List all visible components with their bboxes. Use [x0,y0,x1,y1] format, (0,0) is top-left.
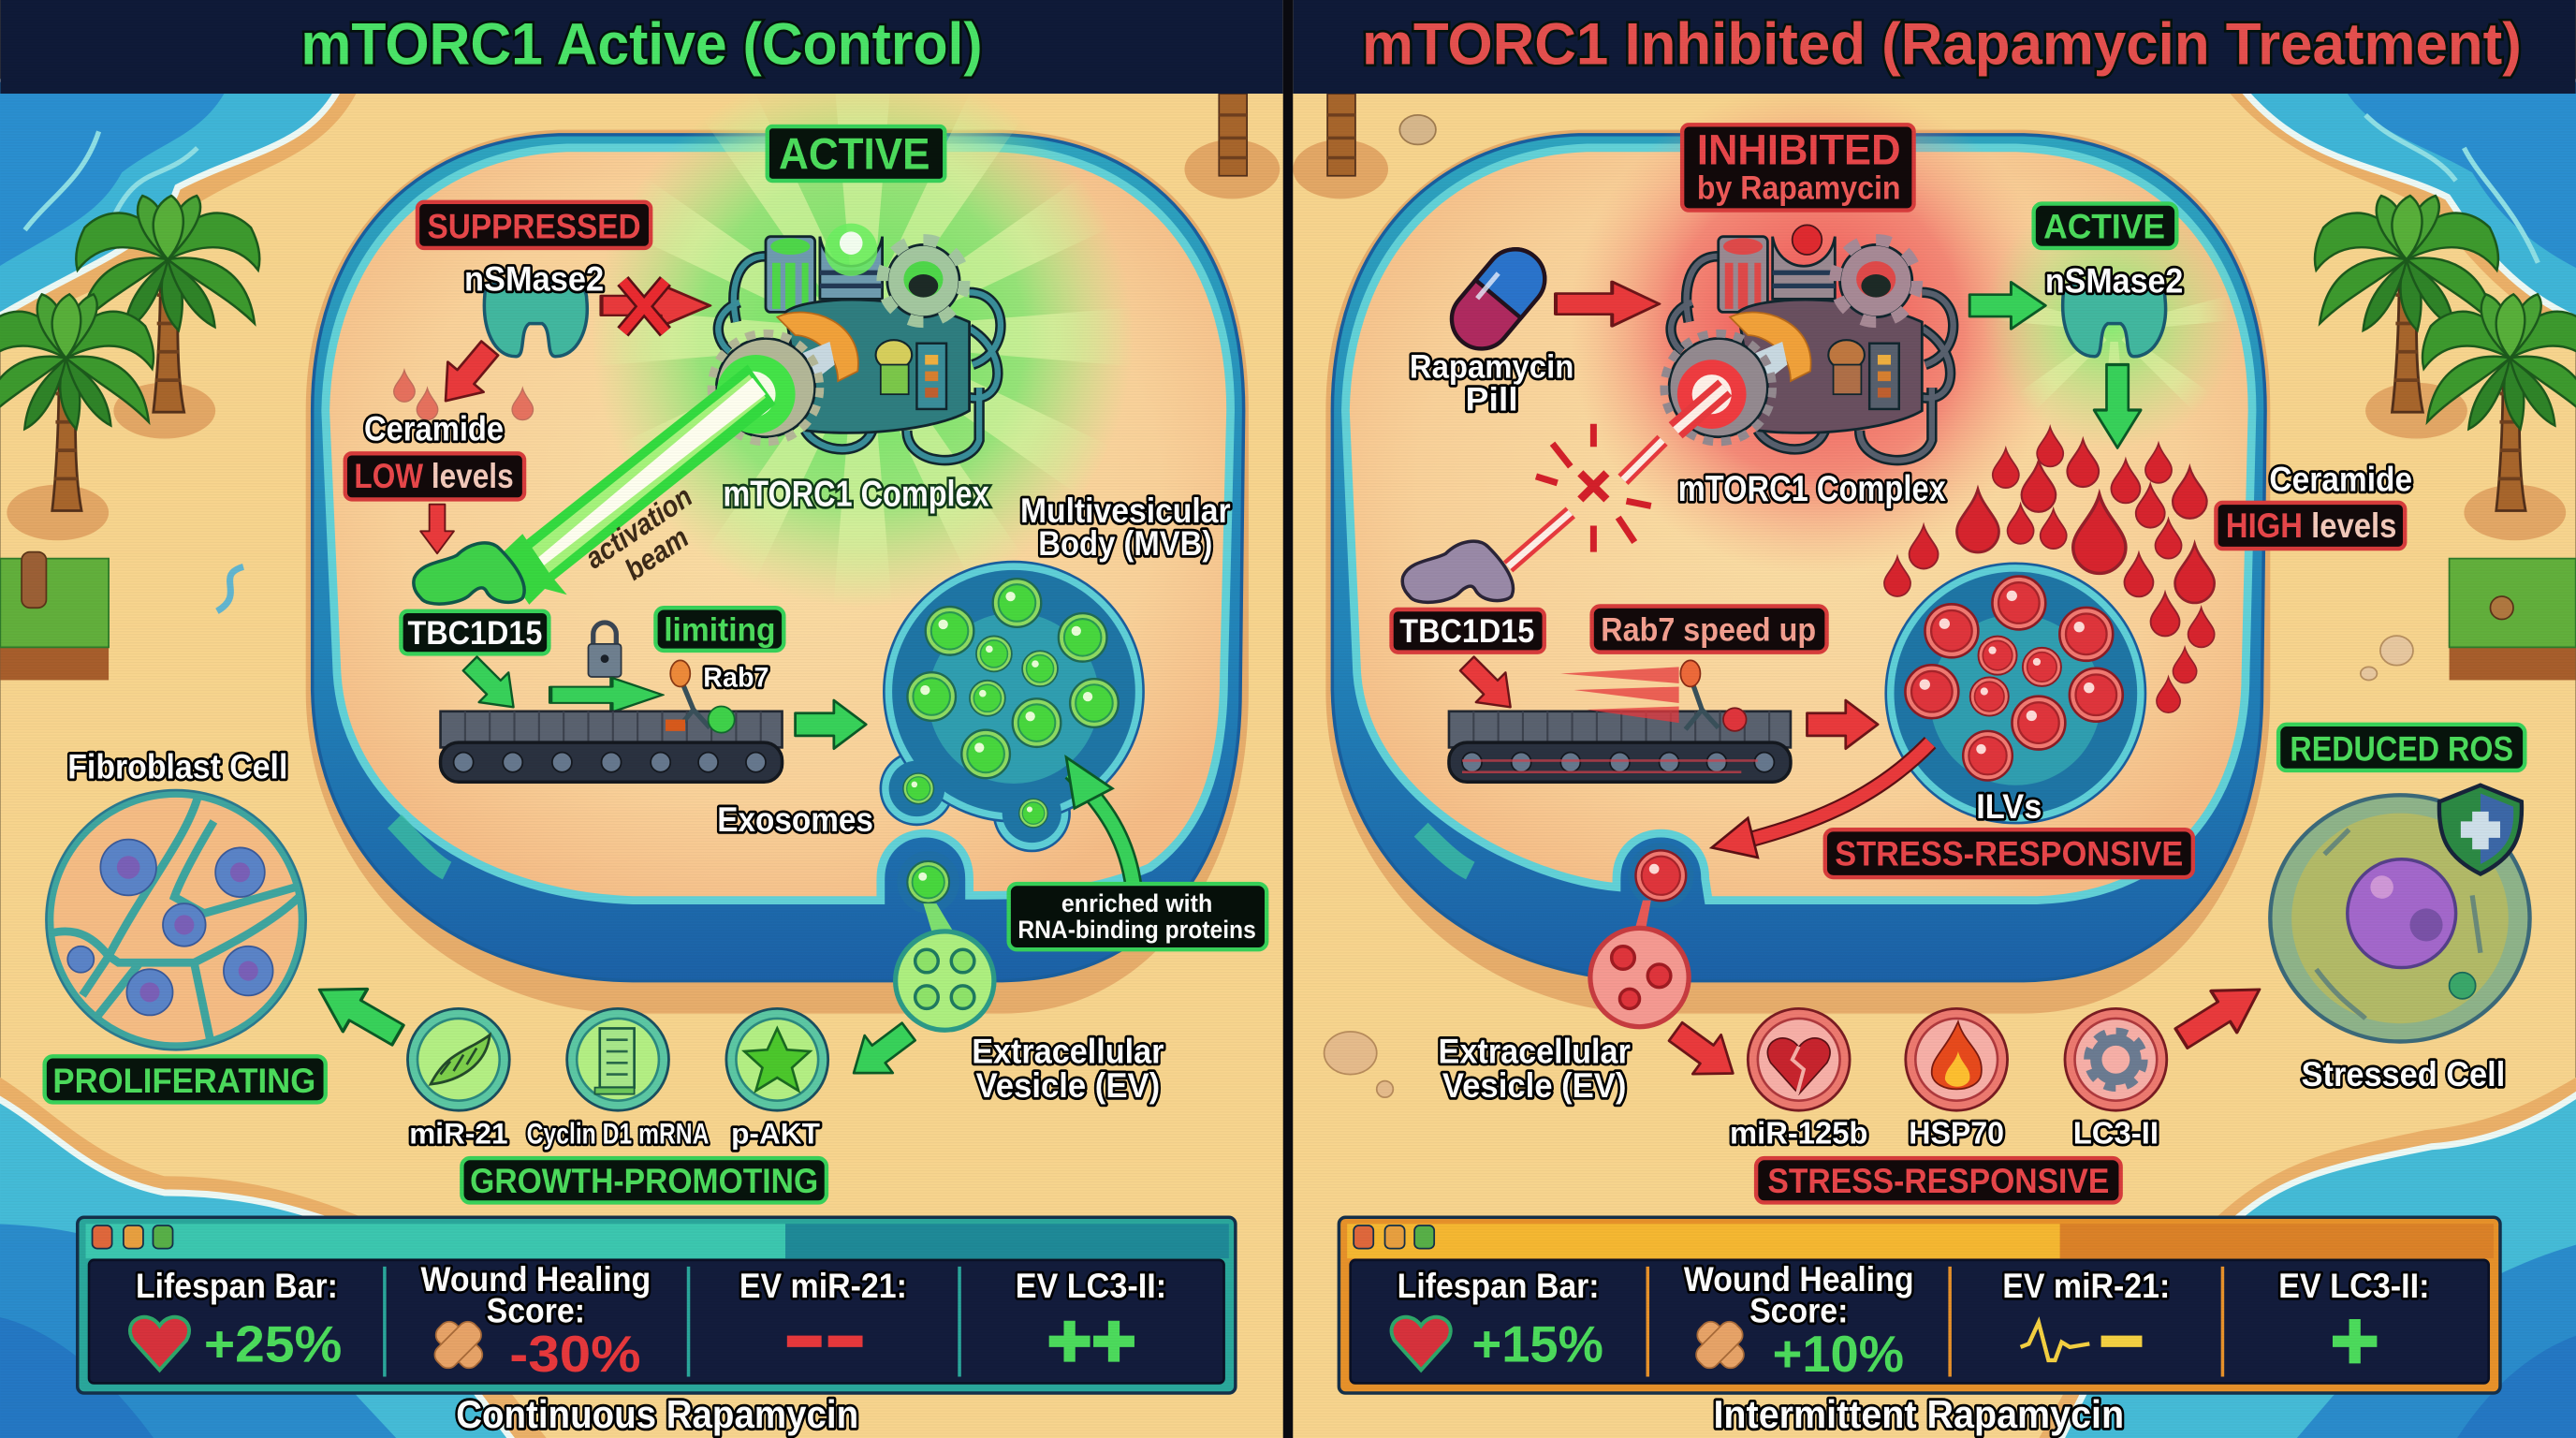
enzyme: nSMase2 right [2063,283,2166,357]
tag: ACTIVE: ACTIVE [779,130,929,180]
ceramide drops: high [1884,427,2215,712]
labels: cargo right: miR-125b [1730,1116,1867,1151]
metric: lifespan right: +15% [1472,1316,1603,1373]
labels: cargo right: LC3-II [2073,1116,2159,1151]
metric: wound healing right: +10% [1773,1326,1904,1383]
labels: cargo left: p-AKT [731,1116,820,1150]
label: Fibroblast Cell: Fibroblast Cell [67,748,287,786]
palm trunk: left panel top [1184,94,1280,198]
metric: EV LC3-II right: EV LC3-II: [2278,1267,2430,1305]
label: Rapamycin Pill: Rapamycin [1410,349,1573,386]
label: Extracellular Vesicle right [1439,1032,1631,1105]
broken beam [1508,388,1725,566]
title: left: mTORC1 Active (Control) [300,11,983,77]
icon: p-AKT [726,1008,828,1110]
MVB: left [881,562,1144,851]
arrow: nSMase2 to ceramide [428,333,507,416]
header bar: right [1293,0,2576,94]
icon: Cyclin D1 mRNA [567,1008,668,1110]
icon: miR-125b broken heart [1748,1008,1850,1110]
palm trunk and rock: right panel top [1293,94,1436,198]
metric: lifespan right [1392,1267,1603,1373]
header bar: left [0,0,1283,94]
tag: STRESS-RESPONSIVE inner: STRESS-RESPONSIVE [1835,835,2183,873]
mTORC1 glow: left [603,94,1122,597]
palm trees: left panel [0,196,259,540]
TBC1D15 grey [1402,541,1513,602]
enzyme: nSMase2 [484,283,587,357]
tag: INHIBITED: by Rapamycin [1697,169,1901,206]
label: Ceramide right: Ceramide [2269,461,2412,499]
grass island: left [0,552,109,680]
window buttons right [1354,1225,1434,1249]
arrow: cargo to stressed cell [2169,969,2273,1059]
blocked arrow with red X [602,281,710,331]
label: Ceramide: Ceramide [364,409,504,448]
palm trees: right panel [2315,196,2576,540]
label: Rab7: Rab7 [703,662,769,693]
water: right panel top-right [2221,82,2576,345]
arrow: TBC1D15 to belt right [1452,649,1525,722]
grass island: right [2450,559,2576,680]
metric: lifespan: Lifespan Bar: [136,1267,338,1305]
arrow: belt to MVB [796,700,866,749]
labels: cargo right [1730,1116,2159,1151]
metric: wound healing: Wound Healing [421,1260,651,1299]
labels: cargo left: Cyclin D1 mRNA [527,1116,709,1150]
beach squiggle and rocks [217,566,2413,1097]
label: Multivesicular Body: Multivesicular [1020,492,1231,530]
window buttons [93,1225,173,1249]
tag: enriched: enriched with [1061,888,1212,917]
labels: cargo right: HSP70 [1909,1116,2004,1151]
icon: lock [588,623,622,677]
label: Extracellular Vesicle left: Vesicle (EV) [976,1066,1160,1105]
tag: limiting: limiting [664,611,776,648]
tag: TBC1D15 right: TBC1D15 [1399,613,1534,650]
label: nSMase2 right: nSMase2 [2045,261,2183,300]
exosome budding [897,851,959,914]
panel: left cell [306,24,1266,1030]
arrow: nSMase2 to ceramide [2094,365,2141,448]
label: Exosomes: Exosomes [717,800,873,839]
nSMase2 glow [1996,228,2228,437]
label: ILVs: ILVs [1976,787,2042,826]
metric: wound healing right [1684,1260,1914,1383]
metric: EV LC3-II [1016,1267,1166,1362]
metric: EV miR-21: EV miR-21: [739,1267,907,1305]
tag: REDUCED ROS: REDUCED ROS [2290,729,2513,768]
water: left panel bottom-left [0,1068,559,1438]
icon: LC3-II gear [2065,1008,2167,1110]
label: Extracellular Vesicle left: Extracellular [972,1032,1164,1070]
tag: enriched [1009,884,1266,949]
text: activation beam: activation [578,479,698,575]
tag: INHIBITED: INHIBITED [1697,125,1901,173]
icon: shield [2439,785,2522,874]
label: Multivesicular Body [1020,492,1231,563]
exosome budding right [1628,843,1693,908]
metric: lifespan: +25% [204,1316,342,1373]
MVB: right [1886,564,2145,823]
title: right: mTORC1 Inhibited (Rapamycin Treatment) [1362,11,2522,77]
cell membrane: left [306,130,1249,1014]
mTORC1 machine: right [1664,225,1954,461]
arrow: limited Rab7 [550,678,663,712]
panel: right cell [1325,82,2412,1027]
label: Stressed Cell: Stressed Cell [2302,1055,2505,1093]
speed lines and Rab7 right [1560,660,1747,731]
tag: TBC1D15: TBC1D15 [407,615,542,652]
labels: cargo left [409,1116,820,1150]
label: Extracellular Vesicle left [972,1032,1164,1105]
metric: EV miR-21 right: EV miR-21: [2002,1267,2170,1305]
text: activation beam: beam [619,520,695,587]
panel: left dashboard [78,1217,1236,1393]
metric: lifespan right: Lifespan Bar: [1398,1267,1600,1305]
metric: EV LC3-II right [2278,1267,2430,1363]
metric: wound healing right: Score: [1749,1292,1848,1330]
curved red arrow [1712,742,1930,858]
mTORC1 label: right: mTORC1 Complex [1678,469,1946,509]
arrow: mTORC1 to nSMase2 [1969,282,2045,329]
label: Extracellular Vesicle right: Vesicle (EV) [1442,1066,1626,1105]
tag: GROWTH-PROMOTING: GROWTH-PROMOTING [470,1162,818,1200]
icon: HSP70 flame [1906,1008,2008,1110]
fibroblast cell [46,790,306,1049]
water: right panel bottom-right [2030,1068,2576,1438]
label: nSMase2: nSMase2 [464,260,604,299]
mTORC1 label: left: mTORC1 Complex [723,474,989,514]
activation beam [496,365,776,605]
metric: wound healing [421,1260,651,1383]
arrow: cargo to fibroblast [307,968,410,1056]
arrow: EV to cargo [840,1013,923,1092]
tag: INHIBITED [1682,125,1914,211]
label: Extracellular Vesicle right: Extracellular [1439,1032,1631,1070]
icon: miR-21 [407,1008,509,1110]
mTORC1 machine: left [711,224,1001,461]
Rab7 figure [666,660,735,733]
ceramide dots: low [394,371,534,420]
tag: ACTIVE right: ACTIVE [2043,207,2165,245]
panel divider [1283,0,1293,1438]
water: left panel top-left [0,82,361,342]
conveyor belt: left [441,712,783,782]
icon: rapamycin pill [1440,237,1557,360]
metric: wound healing right: Wound Healing [1684,1260,1914,1299]
metric: wound healing: Score: [487,1292,585,1330]
label: Rapamycin Pill: Pill [1466,382,1518,418]
TBC1D15 green [414,543,524,604]
tag: SUPPRESSED: SUPPRESSED [428,207,641,245]
tag: LOW levels: LOW levels [354,457,514,495]
caption: Continuous Rapamycin: Continuous Rapamycin [456,1392,858,1436]
label: Multivesicular Body: Body (MVB) [1038,524,1212,563]
metric: EV LC3-II: EV LC3-II: [1016,1267,1166,1305]
metric: EV miR-21 right [2002,1267,2170,1360]
tag: PROLIFERATING: PROLIFERATING [52,1062,315,1100]
arrow: low ceramide to TBC1D15 [420,505,454,553]
arrow: pill to mTORC1 [1556,282,1659,326]
arrow: belt to MVB right [1807,700,1878,749]
conveyor belt: right [1449,712,1791,782]
metric: lifespan [130,1267,342,1373]
tag: enriched: RNA-binding proteins [1017,915,1256,944]
Extracellular vesicle: right [1590,901,1689,1027]
stressed cell [2270,795,2530,1041]
tag: HIGH levels: HIGH levels [2226,506,2396,545]
inhibited glow [1569,82,2061,575]
tag: Rab7 speed up: Rab7 speed up [1601,611,1816,648]
tag: STRESS-RESPONSIVE lower: STRESS-RESPONSIVE [1767,1162,2109,1200]
arrow: TBC1D15 to belt [455,649,528,722]
curved green arrow [1066,757,1134,888]
label: Rapamycin Pill [1410,349,1573,418]
panel: right dashboard [1339,1217,2500,1393]
metric: EV miR-21 [739,1267,907,1347]
cell membrane: right [1325,130,2270,1014]
Extracellular vesicle: left [896,903,994,1030]
arrow: EV to cargo right [1661,1012,1747,1093]
labels: cargo left: miR-21 [409,1116,508,1150]
caption: Intermittent Rapamycin: Intermittent Rapamycin [1713,1392,2124,1436]
metric: wound healing: -30% [509,1326,641,1383]
